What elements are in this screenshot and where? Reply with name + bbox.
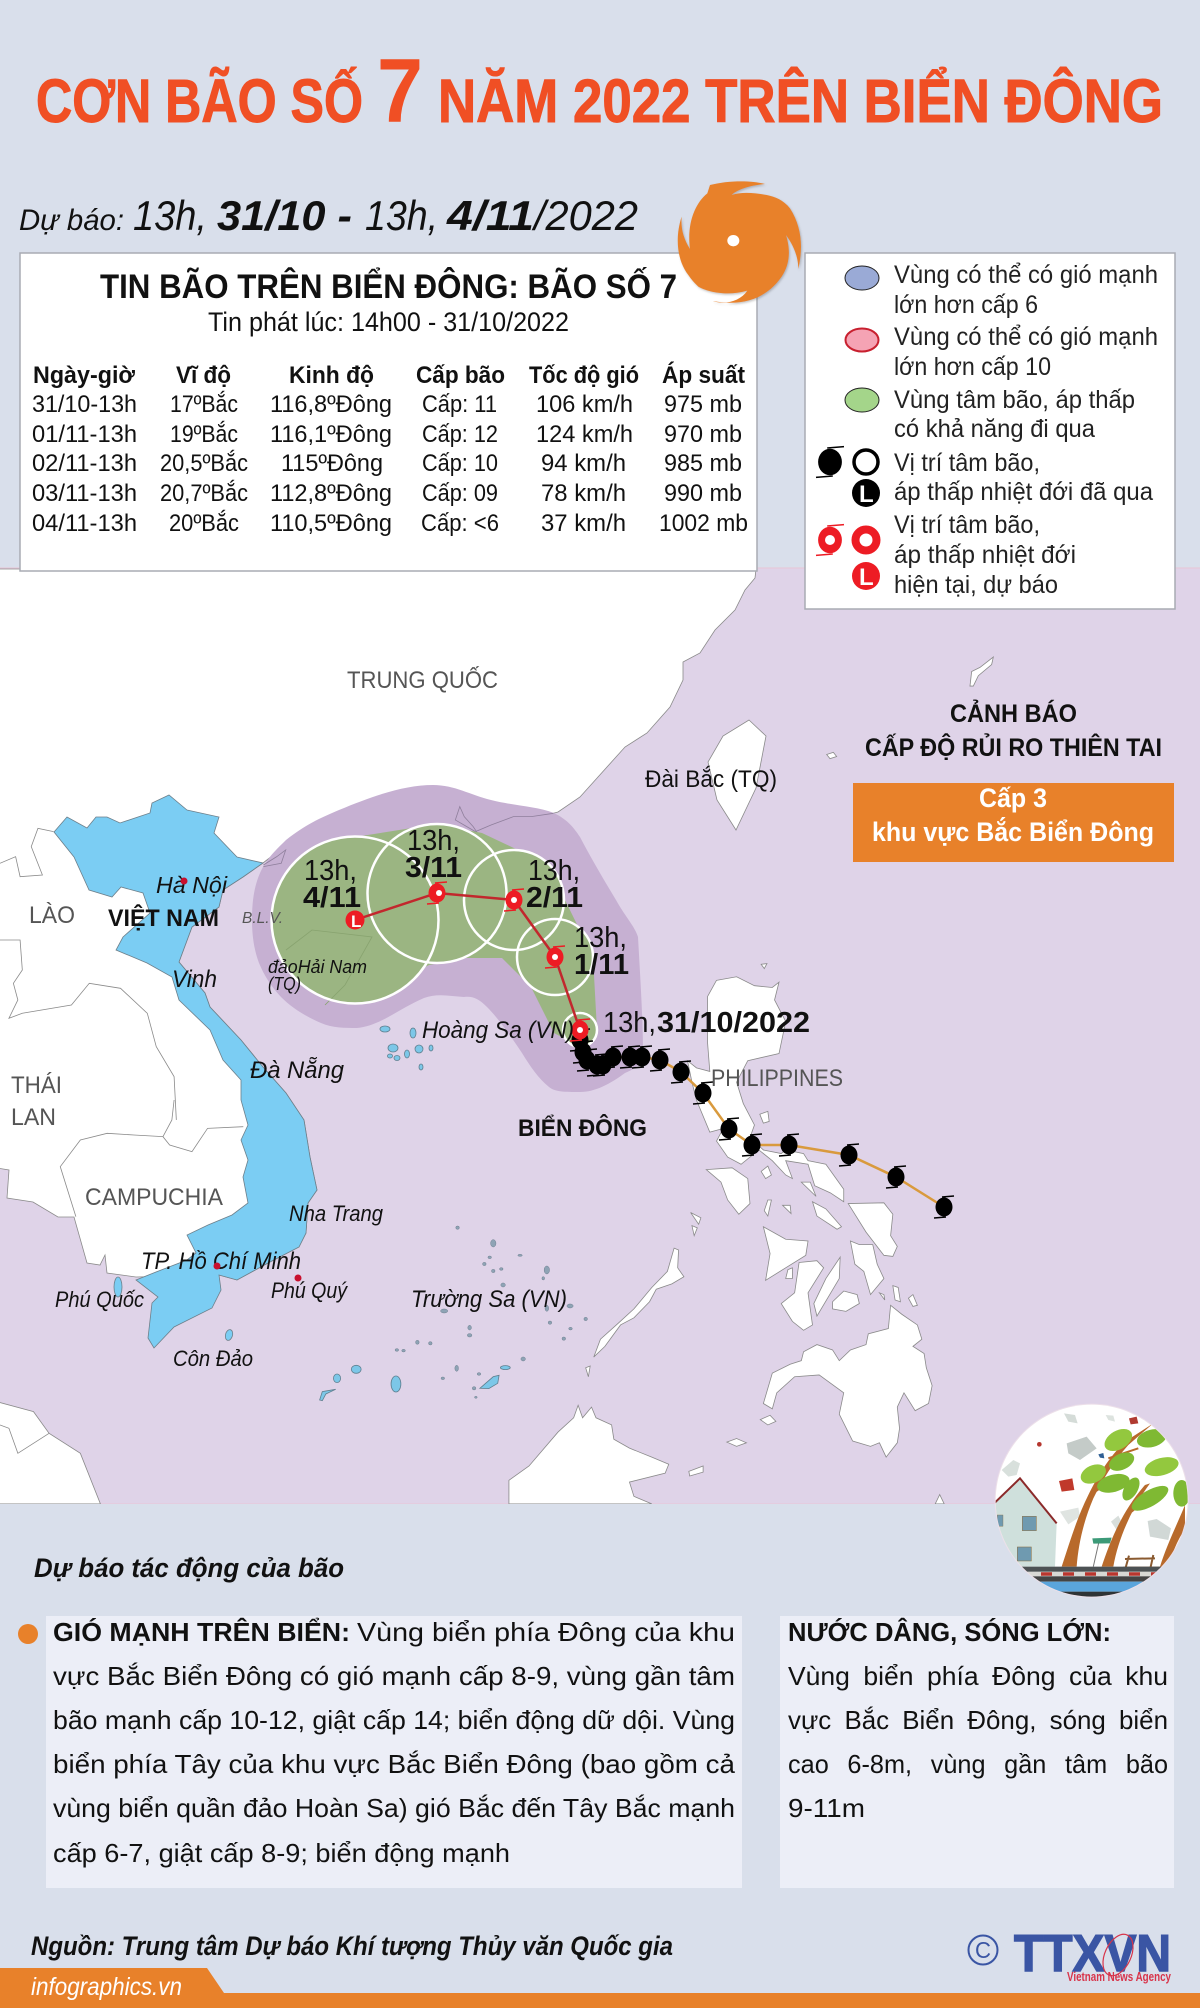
icon: orange typhoon (678, 181, 801, 303)
table row 03/11: 78 km/h (541, 480, 626, 507)
table row 31/10: 106 km/h (536, 391, 633, 418)
table header row: Cấp bão (416, 362, 505, 389)
map: Cambodia border (60, 1100, 243, 1217)
map labels: storm dates: 4/11 (303, 882, 361, 914)
table row 02/11: 02/11-13h (32, 450, 137, 477)
callout: risk level box: Cấp 3 (979, 783, 1047, 813)
trees (1062, 1423, 1190, 1567)
wind text lines: vùng biển quần đảo Hoàn Sa) gió Bắc đến Tây Bắc mạnh (53, 1793, 735, 1823)
map labels: storm dates: 3/11 (405, 852, 462, 884)
table row 03/11: Cấp: 09 (422, 480, 498, 507)
forecast period line (19, 192, 638, 239)
wind text lines (53, 1617, 736, 1868)
title: 7 (377, 41, 423, 142)
forecast positions (red icons) (346, 882, 590, 1041)
legend: past position icons: áp thấp nhiệt đới đã qua (894, 478, 1153, 506)
map: wind risk area above level 6 (purple) (252, 785, 643, 1092)
legend: current and forecast position icons: Vị trí tâm bão, (894, 511, 1040, 539)
table row 02/11: 985 mb (664, 450, 742, 477)
bottom background (0, 1504, 1200, 2008)
legend: green area: Vùng tâm bão, áp thấp (894, 386, 1135, 414)
table row 31/10 (32, 391, 742, 418)
legend: current and forecast position icons: hiện tại, dự báo (894, 571, 1058, 599)
table header row: Kinh độ (289, 362, 374, 389)
table row 31/10: 17ºBắc (170, 391, 238, 418)
legend: past position icons: L (859, 481, 874, 508)
table row 01/11: 124 km/h (536, 421, 633, 448)
table row 03/11: 112,8ºĐông (270, 480, 392, 507)
legend: current and forecast position icons (816, 511, 1076, 599)
map labels: storm dates: 1/11 (574, 949, 629, 981)
map labels: storm dates: 13h, (407, 825, 460, 857)
table row 03/11: 20,7ºBắc (160, 480, 248, 507)
legend: current and forecast position icons: L (859, 564, 874, 591)
map: Hoàng Sa islands (380, 1026, 433, 1070)
legend: pink area (846, 323, 1158, 381)
map labels: places: TP. Hồ Chí Minh (141, 1248, 301, 1275)
map: Philippines and Borneo (509, 964, 944, 1504)
map: Taiwan (708, 720, 766, 830)
table row 31/10: Cấp: 11 (422, 391, 497, 418)
wind text lines: GIÓ MẠNH TRÊN BIỂN: (53, 1617, 350, 1647)
table row 01/11: 116,1ºĐông (270, 421, 392, 448)
map labels: places: TRUNG QUỐC (347, 666, 498, 694)
map labels: places: Đà Nẵng (250, 1056, 345, 1084)
surge text lines: NƯỚC DÂNG, SÓNG LỚN: (788, 1617, 1111, 1647)
table row 01/11: 01/11-13h (32, 421, 137, 448)
map: Phú Quốc and Côn Đảo islands (114, 1277, 234, 1341)
disaster risk warning heading: CẤP ĐỘ RỦI RO THIÊN TAI (865, 732, 1162, 762)
map background: sea (0, 568, 1200, 1504)
disaster risk warning heading: CẢNH BÁO (950, 698, 1077, 728)
surge text lines: 9-11m (788, 1793, 865, 1823)
table row 02/11: Cấp: 10 (422, 450, 498, 477)
disaster risk warning heading (865, 698, 1162, 762)
map labels: places: B.L.V. (242, 910, 283, 927)
table header row: Ngày-giờ (33, 362, 136, 389)
table row 01/11 (32, 421, 742, 448)
map labels: places: Vinh (172, 966, 217, 993)
legend: blue area (845, 261, 1158, 319)
map: small northern islands (827, 657, 993, 759)
table row 03/11: 03/11-13h (32, 480, 137, 507)
map: Trường Sa islands (320, 1226, 587, 1401)
map labels: places: BIỂN ĐÔNG (518, 1114, 647, 1142)
map labels: places: Nha Trang (289, 1201, 384, 1226)
map labels: places: Hà Nội (156, 872, 228, 898)
map: mainland China and Indochina (0, 569, 756, 1280)
forecast track (red line) (355, 893, 580, 1030)
table row 01/11: 19ºBắc (170, 421, 238, 448)
table row 02/11: 94 km/h (541, 450, 626, 477)
map labels: places: PHILIPPINES (711, 1065, 843, 1092)
legend: pink area: Vùng có thể có gió mạnh (894, 323, 1158, 351)
map labels: places: Phú Quý (271, 1278, 349, 1303)
table row 04/11: Cấp: <6 (421, 510, 499, 537)
map labels: storm dates: 13h, (574, 922, 627, 954)
map labels: places: LAN (11, 1104, 56, 1131)
map: storm centre path area (green) (272, 824, 597, 1047)
map labels: places: VIỆT NAM (108, 904, 219, 932)
map labels: places: LÀO (29, 902, 75, 929)
map labels: places: Hoàng Sa (VN) (422, 1017, 574, 1044)
callout: risk level box (853, 783, 1174, 862)
map labels: storm dates: 13h, (304, 855, 357, 887)
past storm track (orange line) (580, 1038, 944, 1207)
bullet: orange dot (18, 1624, 38, 1644)
footer bar with site name (0, 1968, 1200, 2008)
road and water (1022, 1566, 1162, 1597)
legend: past position icons: Vị trí tâm bão, (894, 449, 1040, 477)
debris (1002, 1413, 1171, 1540)
logo: TTXVN: TTXVN (1014, 1925, 1171, 1983)
source line: Nguồn: Trung tâm Dự báo Khí tượng Thủy văn Quốc gia (31, 1931, 673, 1961)
table heading: TIN BÃO TRÊN BIỂN ĐÔNG: BÃO SỐ 7 (100, 267, 677, 306)
legend: green area (845, 386, 1135, 443)
map labels: storm dates (303, 825, 810, 1039)
past storm positions (black icons) (570, 1029, 954, 1218)
forecast period line: /2022 (531, 192, 638, 239)
map labels: places: THÁI (11, 1072, 62, 1099)
wind text lines: vực Bắc Biển Đông có gió mạnh cấp 8-9, vùng gần tâm (53, 1661, 735, 1691)
map labels: storm dates: 31/10/2022 (657, 1007, 810, 1039)
map labels: places: (TQ) (268, 974, 301, 994)
forecast period line: 31/10 - (217, 192, 352, 239)
wind text lines: bão mạnh cấp 10-12, giật cấp 14; biển động dữ dội. Vùng (53, 1705, 735, 1735)
map labels: places: CAMPUCHIA (85, 1184, 223, 1211)
forecast period line: 13h, (365, 192, 438, 239)
map: coastline under the purple area (263, 807, 554, 867)
map labels: storm dates: 13h, (528, 855, 580, 887)
table row 02/11 (32, 450, 742, 477)
logo: TTXVN: C (975, 1937, 991, 1963)
table row 04/11: 20ºBắc (169, 510, 239, 537)
table header row: Áp suất (662, 361, 745, 389)
house (992, 1478, 1057, 1567)
table row 03/11 (32, 480, 742, 507)
table row 03/11: 990 mb (664, 480, 742, 507)
issue time: Tin phát lúc: 14h00 - 31/10/2022 (208, 307, 569, 337)
map labels: places: Đài Bắc (TQ) (645, 766, 777, 793)
map: country borders (0, 828, 176, 1120)
table header row: Tốc độ gió (529, 362, 639, 389)
road sign and fence (1092, 1538, 1162, 1570)
wind text lines: cấp 6-7, giật cấp 8-9; biển động mạnh (53, 1838, 510, 1868)
legend: current and forecast position icons: áp thấp nhiệt đới (894, 541, 1076, 569)
panel: storm surge and waves (780, 1616, 1174, 1888)
forecast period line: 4/11 (446, 192, 534, 239)
table row 04/11: 110,5ºĐông (270, 510, 392, 537)
map labels: places: Trường Sa (VN) (411, 1286, 567, 1313)
legend: blue area: Vùng có thể có gió mạnh (894, 261, 1158, 289)
table row 31/10: 31/10-13h (32, 391, 137, 418)
legend: green area: có khả năng đi qua (894, 415, 1095, 443)
forecast period line: 13h, (133, 192, 207, 239)
map labels: places: Côn Đảo (173, 1346, 253, 1371)
forecast positions (red icons): L (351, 912, 361, 931)
table row 04/11 (32, 510, 748, 537)
wind text lines: biển phía Tây của khu vực Bắc Biển Đông (bao gồm cả (53, 1749, 736, 1779)
map labels: places (11, 666, 843, 1371)
table row 02/11: 20,5ºBắc (160, 450, 248, 477)
surge text lines: cao 6-8m, vùng gần tâm bão (788, 1749, 1168, 1779)
table header row: Vĩ độ (176, 362, 231, 389)
surge text lines: vực Bắc Biển Đông, sóng biển (788, 1705, 1168, 1735)
panel: legend (805, 253, 1175, 609)
forecast period line: Dự báo: (19, 204, 124, 237)
legend: past position icons (816, 447, 1153, 508)
table row 31/10: 116,8ºĐông (270, 391, 392, 418)
map labels: storm dates: 13h, (603, 1007, 656, 1039)
surge text lines (788, 1617, 1168, 1823)
map: Vietnam mainland (54, 795, 317, 1348)
legend: blue area: lớn hơn cấp 6 (894, 291, 1038, 319)
callout: risk level box: khu vực Bắc Biển Đông (872, 816, 1154, 847)
legend: pink area: lớn hơn cấp 10 (894, 353, 1051, 381)
table row 01/11: 970 mb (664, 421, 742, 448)
map labels: storm dates: 2/11 (526, 882, 583, 914)
table row 31/10: 975 mb (664, 391, 742, 418)
table row 04/11: 37 km/h (541, 510, 626, 537)
map labels: places: Phú Quốc (55, 1287, 144, 1312)
title (36, 41, 1163, 142)
surge text lines: Vùng biển phía Đông của khu (788, 1661, 1168, 1691)
map: Malaysia peninsula (0, 1402, 100, 1504)
table header row (33, 361, 745, 389)
panel: strong wind at sea (46, 1616, 742, 1888)
map labels: places: đảoHải Nam (268, 957, 367, 977)
footer bar with site name: infographics.vn (31, 1973, 182, 2001)
table row 01/11: Cấp: 12 (422, 421, 498, 448)
heading: forecast impact: Dự báo tác động của bão (34, 1553, 344, 1583)
title: CƠN BÃO SỐ (36, 67, 363, 135)
table row 04/11: 1002 mb (659, 510, 748, 537)
illustration: house and trees in wind (994, 1404, 1188, 1598)
table row 02/11: 115ºĐông (281, 450, 383, 477)
table row 04/11: 04/11-13h (32, 510, 137, 537)
panel: storm data table (20, 253, 757, 571)
wind text lines: Vùng biển phía Đông của khu (357, 1617, 735, 1647)
